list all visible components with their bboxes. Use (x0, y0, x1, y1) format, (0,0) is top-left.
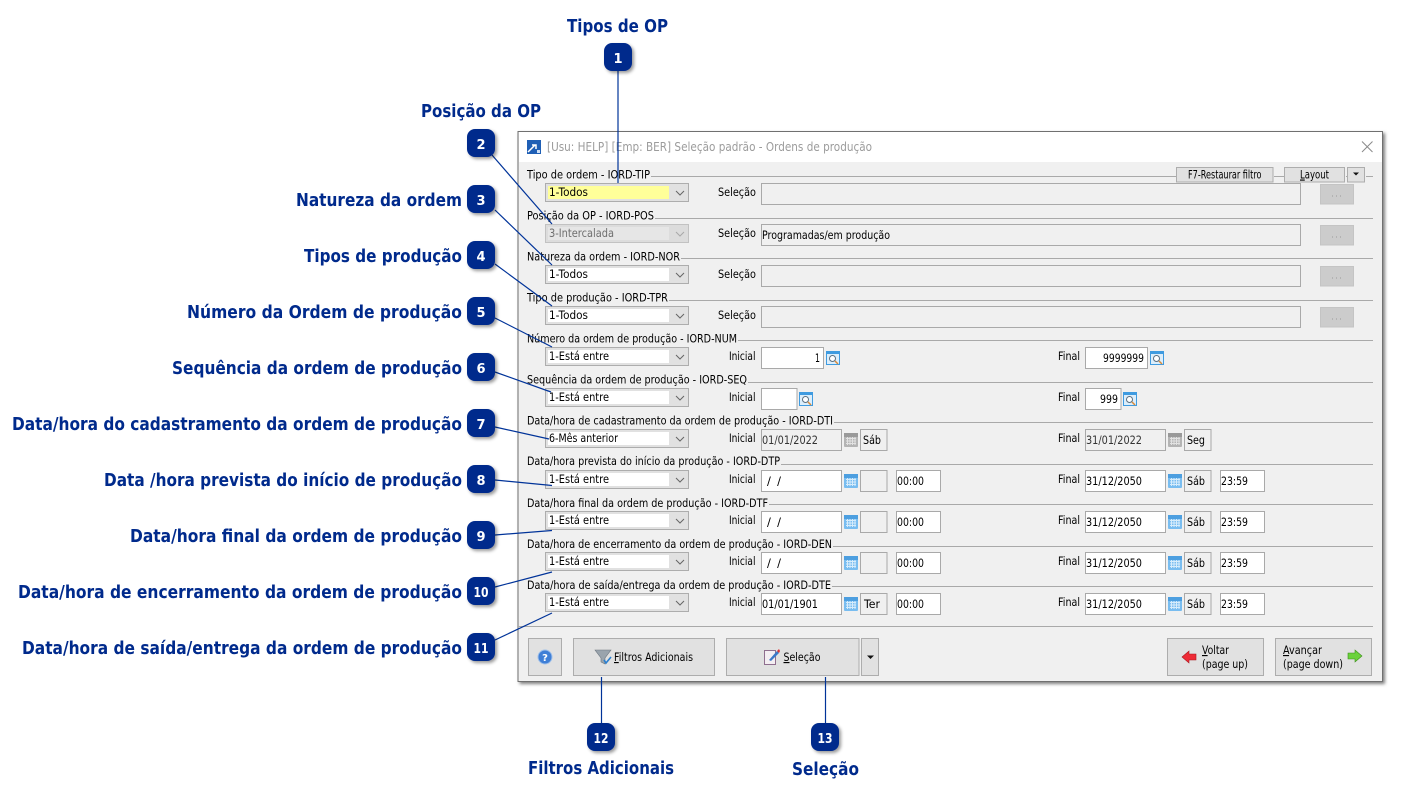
button: help (528, 638, 562, 676)
row: número da ordem de produção: Número da ordem de produção - IORD-NUM (527, 332, 737, 346)
combo: final (546, 512, 688, 530)
icon: calendar (844, 474, 858, 488)
row: data/hora final: 31/12/2050 (1086, 515, 1142, 529)
row: natureza da ordem: Seleção (718, 267, 756, 281)
button: browse (1320, 308, 1354, 327)
callout 5: Número da Ordem de produção: 5 (476, 306, 486, 321)
row: posição da OP: Seleção (718, 226, 756, 240)
combo: sequência: 1-Está entre (549, 390, 609, 404)
callout 3: Natureza da ordem: Natureza da ordem (296, 191, 462, 211)
button: voltar: Voltar (1202, 643, 1229, 657)
row: data/hora de cadastramento: Data/hora de cadastramento da ordem de produção - IORD-DTI (527, 414, 833, 428)
callout 3: Natureza da ordem: 3 (476, 194, 486, 209)
button: browse (1320, 226, 1354, 245)
callout 9: Data/hora final (130, 521, 495, 549)
window title: [Usu: HELP] [Emp: BER] Seleção padrão - Ordens de produção (547, 139, 872, 154)
row: sequência da ordem de produção: 999 (1100, 392, 1118, 406)
button: browse (1320, 266, 1354, 286)
combo: cadastramento (546, 430, 688, 448)
row: número da ordem de produção (527, 332, 1373, 368)
row: data/hora prevista do início: 31/12/2050 (1086, 474, 1142, 488)
callout 4: Tipos de produção: Tipos de produção (304, 247, 462, 267)
icon: calendar (844, 556, 858, 570)
row: data/hora prevista do início: Data/hora prevista do início da produção - IORD-DTP (527, 454, 780, 468)
callout 10: Data/hora de encerramento (18, 577, 495, 605)
combo: final: 1-Está entre (549, 513, 609, 527)
button: layout: Layout (1300, 168, 1329, 182)
button: help: ? (542, 653, 548, 664)
row: data/hora de encerramento: 23:59 (1221, 556, 1248, 570)
row: data/hora final: Sáb (1187, 515, 1205, 529)
combo: encerramento: 1-Está entre (549, 554, 609, 568)
callout 9: Data/hora final: Data/hora final da ordem de produção (130, 527, 462, 547)
window frame (518, 132, 1382, 682)
row: tipo de produção (526, 290, 1373, 328)
icon: calendar disabled (844, 433, 858, 447)
callout 2: Posição da OP: Posição da OP (421, 102, 541, 122)
callout 4: Tipos de produção: 4 (476, 250, 486, 265)
row: tipo de ordem: Seleção (718, 185, 756, 199)
row: número da ordem de produção: 1 (815, 351, 820, 365)
combo: tipo de ordem (546, 184, 688, 202)
row: tipo de ordem (526, 168, 1373, 204)
row: tipo de ordem: Tipo de ordem - IORD-TIP (526, 168, 650, 182)
row: data/hora de encerramento: Final (1058, 554, 1080, 568)
icon: search (1123, 392, 1137, 406)
row: número da ordem de produção: 9999999 (1103, 351, 1144, 365)
callout 5: Número da Ordem de produção: Número da Ordem de produção (187, 303, 462, 323)
callout 6: Sequência da ordem de produção: 6 (476, 362, 486, 377)
callout 1: Tipos de OP (567, 17, 668, 71)
leader lines (492, 70, 826, 723)
row: posição da OP: Posição da OP - IORD-POS (527, 208, 654, 222)
combo: saída/entrega: 1-Está entre (549, 595, 609, 609)
callout 12: Filtros Adicionais: 12 (594, 732, 608, 747)
button: filtros adicionais: Filtros Adicionais (614, 650, 693, 664)
combo: sequência (546, 388, 688, 406)
icon: calendar (844, 515, 858, 529)
combo: tipo de ordem: 1-Todos (549, 185, 588, 199)
row: posição da OP (527, 208, 1373, 246)
row: número da ordem de produção: Final (1058, 349, 1080, 363)
combo: posição (disabled) (546, 224, 688, 242)
row: sequência da ordem de produção (527, 372, 1373, 410)
combo: prevista (546, 470, 688, 488)
icon: calendar (844, 597, 858, 611)
combo: cadastramento: 6-Mês anterior (549, 431, 618, 445)
callout 3: Natureza da ordem (296, 185, 495, 213)
row: posição da OP: Programadas/em produção (762, 228, 890, 242)
button: avançar: (page down) (1283, 657, 1343, 671)
button: voltar: (page up) (1202, 657, 1248, 671)
callout 13: Seleção (792, 723, 859, 780)
callout 11: Data/hora de saída/entrega: Data/hora de saída/entrega da ordem de produção (22, 639, 462, 659)
icon: application logo (527, 140, 541, 154)
combo: prevista: 1-Está entre (549, 472, 609, 486)
row: data/hora de encerramento (527, 537, 1373, 574)
callout 1: Tipos de OP: Tipos de OP (567, 17, 668, 37)
button: seleção (726, 638, 859, 676)
row: data/hora prevista do início: Final (1058, 472, 1080, 486)
panel: application window (518, 132, 1382, 682)
callout 7: Data/hora do cadastramento (12, 409, 495, 437)
row: data/hora final: Data/hora final da ordem de produção - IORD-DTF (527, 496, 768, 510)
row: sequência da ordem de produção: Sequência da ordem de produção - IORD-SEQ (527, 372, 747, 386)
combo: tipo de produção (546, 306, 688, 324)
button: filtros adicionais (574, 638, 714, 676)
button: layout (1284, 168, 1344, 182)
title bar (519, 132, 1382, 162)
callout 11: Data/hora de saída/entrega (22, 633, 495, 661)
icon: search (799, 392, 813, 406)
row: data/hora de saída/entrega: Data/hora de saída/entrega da ordem de produção - IORD-DTE (527, 578, 831, 592)
callout 9: Data/hora final: 9 (476, 530, 486, 545)
icon: calendar (1168, 474, 1182, 488)
row: data/hora prevista do início: / / (767, 474, 781, 488)
row: data/hora prevista do início: Sáb (1187, 474, 1205, 488)
row: data/hora final: Final (1058, 513, 1080, 527)
callout 7: Data/hora do cadastramento: Data/hora do cadastramento da ordem de produção (12, 415, 462, 435)
icon: calendar (1168, 597, 1182, 611)
row: data/hora de saída/entrega: 00:00 (897, 597, 924, 611)
combo: encerramento (546, 552, 688, 570)
row: data/hora de cadastramento: Seg (1187, 433, 1205, 447)
combo: posição (disabled): 3-Intercalada (549, 226, 614, 240)
icon: calendar (1168, 556, 1182, 570)
row: data/hora de encerramento: Sáb (1187, 556, 1205, 570)
icon: calendar (1168, 515, 1182, 529)
button: layout dropdown (1348, 168, 1364, 182)
row: número da ordem de produção: Inicial (729, 349, 756, 363)
row: natureza da ordem (527, 250, 1373, 286)
callout 4: Tipos de produção (304, 241, 495, 269)
row: data/hora de cadastramento: 01/01/2022 (762, 433, 818, 447)
row: data/hora final: / / (767, 515, 781, 529)
callout 13: Seleção: 13 (818, 732, 832, 747)
row: data/hora final: 00:00 (897, 515, 924, 529)
icon: close (1362, 142, 1372, 152)
row: sequência da ordem de produção: Final (1058, 390, 1080, 404)
row: data/hora final: Inicial (729, 513, 756, 527)
row: data/hora de encerramento: / / (767, 556, 781, 570)
row: data/hora de cadastramento: Final (1058, 431, 1080, 445)
button: avançar: Avançar (1283, 643, 1322, 657)
button: seleção: Seleção (784, 650, 820, 664)
row: data/hora de encerramento: 00:00 (897, 556, 924, 570)
row: data/hora prevista do início: 00:00 (897, 474, 924, 488)
row: data/hora de cadastramento: 31/01/2022 (1086, 433, 1142, 447)
callout 6: Sequência da ordem de produção: Sequência da ordem de produção (172, 359, 462, 379)
row: data/hora prevista do início: 23:59 (1221, 474, 1248, 488)
button: voltar (1168, 638, 1264, 676)
row: data/hora de saída/entrega: Inicial (729, 595, 756, 609)
row: natureza da ordem: Natureza da ordem - IORD-NOR (527, 250, 680, 264)
callout 12: Filtros Adicionais (528, 723, 674, 779)
combo: tipo de produção: 1-Todos (549, 308, 588, 322)
button: browse (1320, 184, 1354, 204)
row: data/hora de saída/entrega: Final (1058, 595, 1080, 609)
icon: search (826, 351, 840, 364)
callout 7: Data/hora do cadastramento: 7 (476, 418, 486, 433)
row: data/hora de encerramento: 31/12/2050 (1086, 556, 1142, 570)
combo: natureza: 1-Todos (549, 267, 588, 281)
callout 8: Data /hora prevista (104, 465, 495, 493)
callout 10: Data/hora de encerramento: 10 (474, 586, 488, 601)
row: data/hora de encerramento: Data/hora de encerramento da ordem de produção - IORD-DEN (527, 537, 832, 551)
combo: natureza (546, 266, 688, 284)
button: seleção dropdown (862, 638, 878, 676)
combo: número (546, 348, 688, 366)
icon: calendar disabled (1168, 433, 1182, 447)
callout 10: Data/hora de encerramento: Data/hora de encerramento da ordem de produção (18, 583, 462, 603)
row: tipo de produção: Tipo de produção - IORD-TPR (526, 290, 668, 304)
row: data/hora final: 23:59 (1221, 515, 1248, 529)
row: data/hora de saída/entrega (527, 578, 1373, 614)
row: data/hora de cadastramento: Inicial (729, 431, 756, 445)
button: F7 restaurar filtro: F7-Restaurar filtro (1188, 168, 1262, 182)
row: data/hora final (527, 496, 1373, 532)
row: data/hora de cadastramento (527, 414, 1373, 450)
callout 12: Filtros Adicionais: Filtros Adicionais (528, 759, 674, 779)
callout 8: Data /hora prevista: 8 (476, 474, 486, 489)
combo: saída/entrega (546, 594, 688, 612)
callout 8: Data /hora prevista: Data /hora prevista do início de produção (104, 471, 462, 491)
row: data/hora de encerramento: Inicial (729, 554, 756, 568)
callout 2: Posição da OP: 2 (476, 138, 486, 153)
icon: search (1150, 351, 1164, 364)
row: data/hora de cadastramento: Sáb (863, 433, 881, 447)
row: sequência da ordem de produção: Inicial (729, 390, 756, 404)
row: data/hora de saída/entrega: Sáb (1187, 597, 1205, 611)
row: data/hora prevista do início (527, 454, 1373, 492)
button: avançar (1276, 638, 1372, 676)
callout 1: Tipos de OP: 1 (613, 52, 623, 67)
row: data/hora de saída/entrega: 23:59 (1221, 597, 1248, 611)
callout 2: Posição da OP (421, 102, 541, 157)
row: data/hora de saída/entrega: Ter (863, 597, 880, 611)
combo: número: 1-Está entre (549, 349, 609, 363)
callout 11: Data/hora de saída/entrega: 11 (474, 642, 488, 657)
row: data/hora de saída/entrega: 01/01/1901 (762, 597, 818, 611)
row: tipo de produção: Seleção (718, 308, 756, 322)
row: data/hora de saída/entrega: 31/12/2050 (1086, 597, 1142, 611)
row: data/hora prevista do início: Inicial (729, 472, 756, 486)
callout 13: Seleção: Seleção (792, 760, 859, 780)
